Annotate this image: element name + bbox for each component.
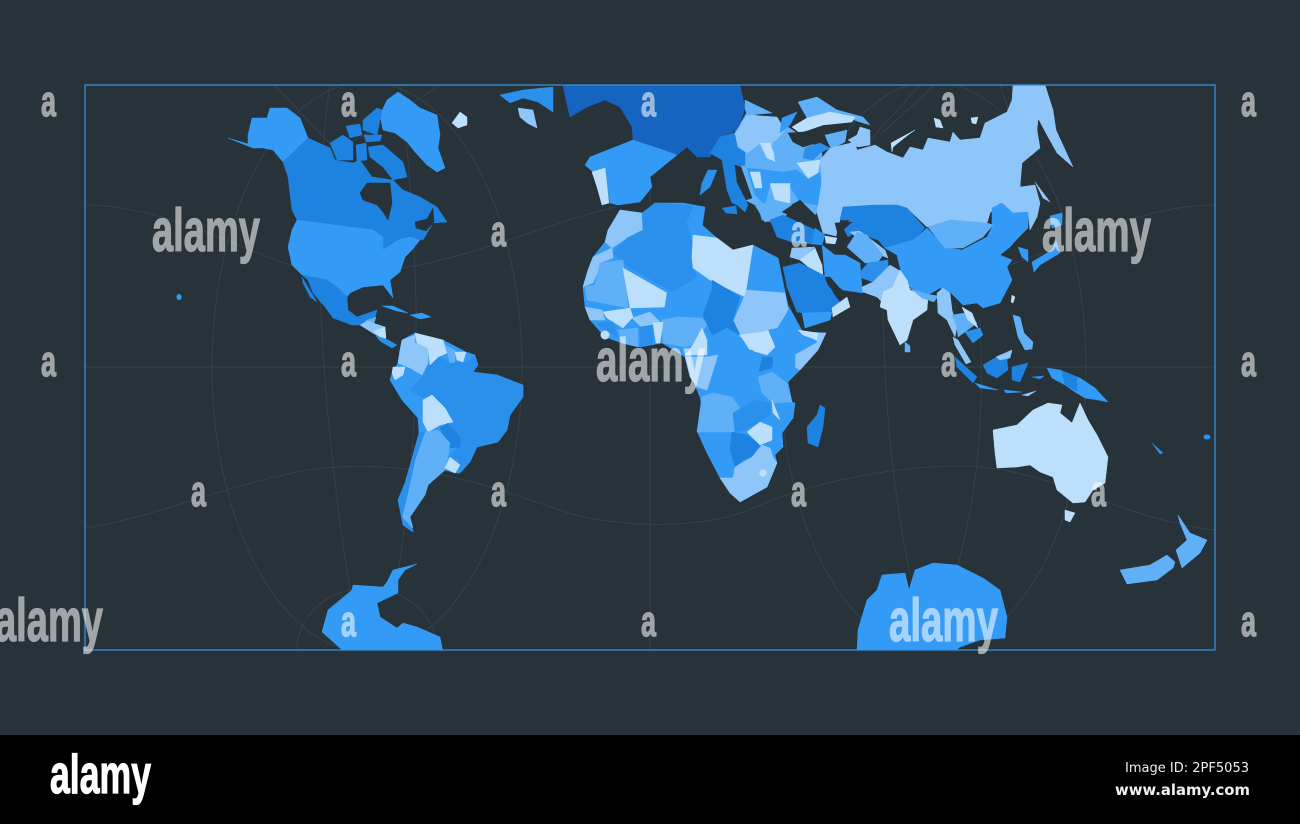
arctic russia islands: [891, 130, 915, 152]
watermark grid: alamy: [889, 587, 998, 654]
sakhalin: [1035, 182, 1050, 202]
usa: [288, 220, 420, 298]
zimbabwe: [747, 422, 772, 445]
turkey: [770, 215, 820, 245]
thailand: [952, 313, 977, 337]
india: [880, 270, 928, 345]
oman: [832, 297, 850, 317]
watermark grid: a: [191, 467, 206, 516]
morocco: [605, 210, 643, 248]
watermark grid: a: [641, 77, 656, 126]
paraguay: [440, 423, 460, 448]
new caledonia: [1152, 443, 1163, 454]
world map: [177, 85, 1210, 652]
kamchatka: [1038, 110, 1073, 167]
tunisia: [687, 207, 705, 243]
angola: [697, 393, 740, 432]
pakistan: [862, 265, 902, 303]
spain: [585, 140, 677, 205]
watermark grid: a: [791, 207, 806, 256]
tanzania: [758, 372, 792, 403]
hokkaido: [1050, 213, 1062, 228]
cuba: [382, 306, 408, 313]
botswana: [730, 432, 760, 467]
java: [975, 383, 998, 390]
south america base: [390, 333, 523, 532]
ukraine: [808, 172, 823, 205]
malawi: [772, 400, 780, 420]
mexico: [302, 275, 377, 325]
watermark grid: alamy: [152, 197, 260, 264]
malaysia: [953, 337, 971, 364]
baltic states: [803, 143, 830, 160]
africa base: [583, 203, 826, 502]
argentina: [402, 430, 450, 528]
vietnam: [965, 328, 983, 343]
sicily: [722, 206, 737, 214]
russia: [817, 85, 1053, 236]
persian gulf: [825, 277, 843, 293]
europe base: [710, 112, 822, 222]
italy: [710, 133, 748, 212]
watermark grid: a: [1241, 597, 1256, 646]
baltic: [788, 127, 847, 147]
philippines: [1013, 315, 1033, 350]
gulf of st lawrence: [415, 208, 434, 231]
antarctica west: [322, 564, 443, 652]
kazakhstan: [840, 205, 925, 248]
footer logo: alamy: [50, 743, 151, 805]
uruguay: [445, 457, 460, 473]
new zealand north: [1176, 515, 1207, 568]
venezuela: [415, 333, 447, 365]
mongolia: [928, 220, 993, 248]
watermark grid: a: [1091, 467, 1106, 516]
black sea: [782, 200, 817, 228]
mali: [623, 268, 667, 308]
tasmania: [1065, 510, 1075, 522]
laos: [962, 307, 978, 328]
colombia: [398, 335, 428, 375]
image id: Image ID: 2PF5053: [1125, 760, 1249, 776]
website: www.alamy.com: [1115, 781, 1250, 799]
australia: [993, 403, 1108, 503]
iceland: [452, 112, 467, 128]
asia: [770, 85, 1108, 402]
alaska: [228, 108, 308, 162]
bangladesh and nepal: [910, 288, 938, 302]
greece: [758, 200, 792, 222]
hungary: [773, 137, 803, 172]
watermark grid: a: [491, 467, 506, 516]
gabon and congo: [685, 355, 718, 390]
lesotho: [760, 470, 766, 476]
corsica and sardinia: [700, 170, 717, 195]
watermark grid: a: [1241, 337, 1256, 386]
canada: [283, 138, 447, 250]
bulgaria: [770, 183, 790, 203]
hudson bay: [360, 183, 392, 220]
croatia: [747, 168, 790, 205]
watermark grid: a: [941, 337, 956, 386]
sri lanka: [905, 342, 910, 352]
fiji: [1204, 435, 1210, 439]
cameroon: [685, 328, 707, 355]
watermark grid: a: [791, 467, 806, 516]
nigeria: [662, 317, 707, 347]
watermark grid: a: [941, 77, 956, 126]
egypt: [747, 252, 785, 292]
watermark grid: alamy: [1042, 197, 1151, 264]
djibouti: [798, 330, 818, 340]
ivory coast: [618, 328, 638, 347]
benin: [653, 322, 663, 343]
sumatra: [955, 357, 977, 383]
yemen: [802, 312, 832, 328]
uzbekistan: [850, 231, 888, 258]
oceania: [177, 294, 1210, 584]
syria: [790, 247, 815, 260]
ethiopia: [773, 320, 818, 355]
watermark grid: a: [1241, 77, 1256, 126]
footer band: [0, 735, 1300, 824]
zambia: [733, 400, 770, 432]
baja california: [302, 277, 317, 302]
serbia: [783, 170, 825, 205]
antarctica: [322, 563, 1007, 652]
libya: [692, 235, 753, 297]
sudan: [733, 290, 788, 337]
china: [885, 203, 1028, 308]
graticule: [86, 86, 1214, 650]
france: [563, 85, 745, 157]
romania: [797, 160, 820, 178]
great britain: [500, 87, 553, 112]
chad: [703, 280, 740, 337]
algeria: [613, 203, 697, 292]
ecuador: [392, 367, 405, 380]
drc: [705, 350, 770, 408]
turkmenistan: [847, 232, 883, 263]
japan: [1032, 240, 1060, 272]
mauritania: [585, 260, 628, 308]
caspian sea: [835, 222, 852, 253]
suriname: [455, 352, 466, 362]
watermark grid: a: [41, 337, 56, 386]
pacific dot: [177, 294, 181, 300]
new guinea west: [1062, 371, 1077, 391]
watermark grid: alamy: [0, 587, 103, 654]
watermark grid: a: [341, 597, 356, 646]
finland: [792, 112, 855, 133]
ireland: [518, 108, 537, 128]
kenya: [772, 353, 795, 382]
bolivia: [423, 395, 453, 432]
niger: [652, 277, 712, 320]
afghanistan: [860, 260, 888, 282]
antarctica east: [857, 563, 1007, 652]
iran: [822, 245, 863, 293]
guinea: [595, 322, 618, 337]
sunda islands: [1004, 390, 1022, 393]
chile: [398, 432, 425, 532]
western sahara: [583, 248, 613, 287]
north russia lands: [798, 97, 870, 125]
portugal: [592, 168, 609, 205]
somalia: [795, 332, 826, 370]
sweden: [825, 130, 847, 147]
hispaniola: [410, 313, 431, 319]
south africa: [720, 445, 777, 502]
guyana: [445, 345, 455, 363]
south america: [390, 333, 523, 532]
car: [705, 328, 747, 355]
namibia: [698, 433, 733, 478]
myanmar: [937, 288, 957, 337]
czechia: [760, 143, 777, 162]
saudi arabia: [783, 263, 842, 313]
iraq: [800, 248, 823, 275]
watermark grid: a: [341, 337, 356, 386]
azerbaijan: [825, 236, 837, 244]
sierra leone: [601, 331, 609, 339]
watermark grid: a: [41, 77, 56, 126]
europe: [500, 85, 870, 222]
new zealand south: [1120, 555, 1175, 584]
armenia: [812, 228, 825, 245]
burkina faso: [632, 312, 660, 328]
sulawesi: [1012, 363, 1028, 382]
new guinea: [1047, 368, 1108, 402]
map frame: [85, 85, 1215, 650]
norway: [780, 112, 797, 133]
watermark grid: a: [641, 597, 656, 646]
ghana: [640, 325, 653, 347]
africa: [583, 203, 826, 502]
adriatic: [735, 165, 752, 200]
guinea light: [603, 308, 633, 328]
germany poland: [735, 115, 785, 153]
albania: [750, 172, 762, 188]
brazil: [410, 355, 523, 473]
senegal: [585, 307, 605, 320]
north america: [228, 92, 467, 348]
seas: [735, 127, 852, 293]
south sudan: [740, 330, 775, 355]
borneo north: [996, 350, 1012, 360]
taiwan: [1011, 295, 1015, 303]
watermark grid: alamy: [596, 327, 705, 394]
madagascar: [807, 405, 825, 447]
denmark: [745, 100, 772, 115]
arctic islands: [330, 108, 407, 180]
borneo: [983, 352, 1012, 378]
mozambique: [770, 403, 795, 455]
watermark grid: a: [341, 77, 356, 126]
watermark grid: [0, 77, 1256, 654]
uganda: [758, 357, 773, 372]
central america: [360, 317, 397, 348]
korea: [1018, 247, 1028, 262]
watermark grid: a: [491, 207, 506, 256]
estonia: [848, 127, 870, 147]
greenland: [380, 92, 445, 172]
